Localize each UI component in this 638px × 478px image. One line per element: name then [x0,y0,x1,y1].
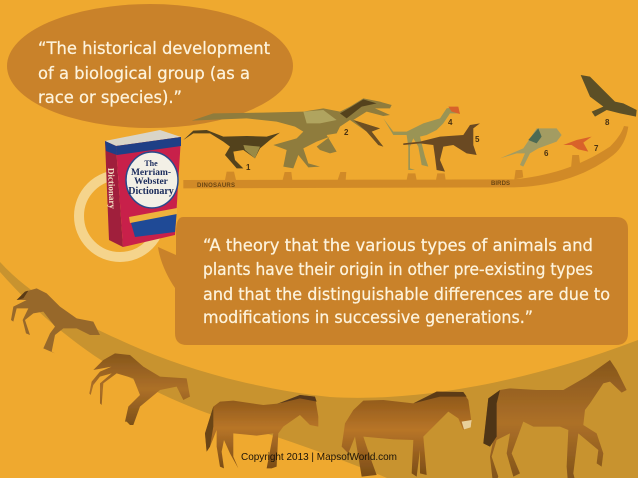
species numbers: 1 [246,163,251,172]
dinosaur 6 [500,128,562,167]
definition text 2 [203,236,610,327]
dictionary book [105,130,181,247]
curved evolution band [0,262,638,478]
dinosaur to bird timeline: BIRDS [491,181,510,187]
definition text 2: modifications in successive generations.” [203,308,533,327]
definition text 2: “A theory that the various types of animals and [203,236,593,255]
horse 5 [483,360,627,478]
species numbers [246,118,610,172]
speech bubble: theory definition [158,217,628,345]
horse 3 [205,395,318,468]
dinosaur to bird timeline [183,75,637,189]
book title: Merriam- [131,168,171,178]
definition text 2: and that the distinguishable differences are due to [203,285,610,304]
timeline bar [183,126,628,188]
dinosaur 4 [383,107,460,170]
book title: Webster [134,177,169,187]
book title: Dictionary [128,186,174,197]
species numbers: 5 [475,135,480,144]
definition text 1: race or species).” [38,88,182,107]
dinosaur 5 [403,123,480,172]
bird 7 [563,137,592,152]
horse 4 [342,392,472,477]
definition text 1 [38,39,271,107]
copyright: Copyright 2013 | MapsofWorld.com [241,452,397,463]
horse 2 [89,353,190,425]
definition text 1: of a biological group (as a [38,64,250,83]
bird 8 [581,75,637,117]
species numbers: 6 [544,149,549,158]
book title [128,159,174,197]
horse 1 [11,288,100,353]
book title: The [144,159,158,168]
timeline labels: DINOSAURS [197,183,235,189]
definition text 2: plants have their origin in other pre-existing types [203,260,593,279]
book spine text: Dictionary [106,168,117,210]
species numbers: 8 [605,118,610,127]
dinosaur 2 [192,98,392,168]
species numbers: 4 [448,118,453,127]
definition text 1: “The historical development [38,39,271,58]
species numbers: 2 [344,128,349,137]
species numbers: 7 [594,144,599,153]
speech ellipse: historical definition [7,4,293,128]
cream ring behind dictionary [79,175,161,257]
dinosaur 1 [183,130,280,168]
